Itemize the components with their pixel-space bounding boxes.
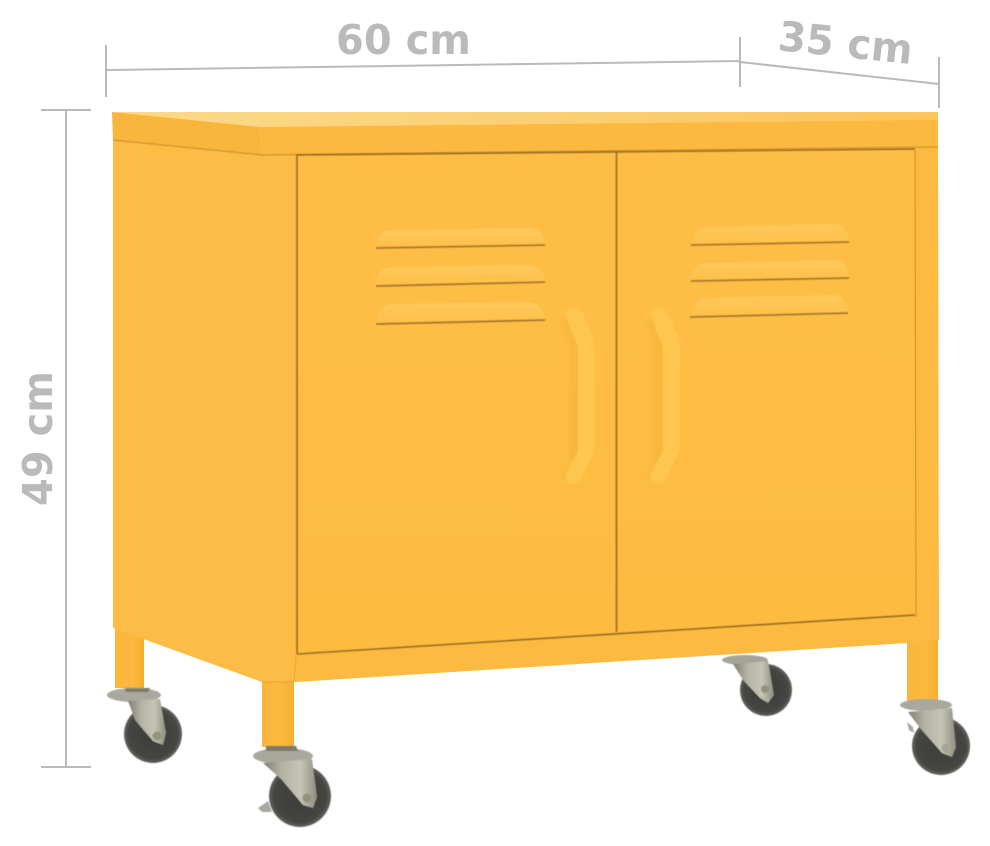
front frame <box>296 147 939 682</box>
left side panel <box>113 140 296 682</box>
right door handle <box>650 307 680 484</box>
right frame edge <box>915 149 916 617</box>
right door vents <box>690 224 849 317</box>
band shadow line <box>113 140 938 155</box>
front right leg <box>907 640 938 701</box>
front right caster <box>900 699 970 775</box>
front corner edge <box>262 656 296 682</box>
back right caster <box>722 655 792 716</box>
dimension: width 60 cm <box>106 16 740 97</box>
dimension: depth 35 cm: 35 cm <box>776 12 915 74</box>
cabinet body <box>112 112 939 682</box>
top band left <box>112 112 262 155</box>
back left caster <box>107 688 182 763</box>
top surface <box>113 112 938 128</box>
dimension: height 49 cm: 49 cm <box>14 371 62 506</box>
front left caster <box>253 746 331 827</box>
back left leg <box>115 626 144 688</box>
dimension: depth 35 cm <box>740 12 939 108</box>
dimension: width 60 cm: 60 cm <box>336 16 471 64</box>
left door handle <box>565 307 595 484</box>
door seams <box>297 149 915 654</box>
left door <box>297 152 615 654</box>
front left leg <box>262 680 294 747</box>
dimension: height 49 cm <box>14 110 91 767</box>
right door <box>618 149 915 632</box>
top band front <box>260 120 938 155</box>
left door vents <box>376 228 545 324</box>
